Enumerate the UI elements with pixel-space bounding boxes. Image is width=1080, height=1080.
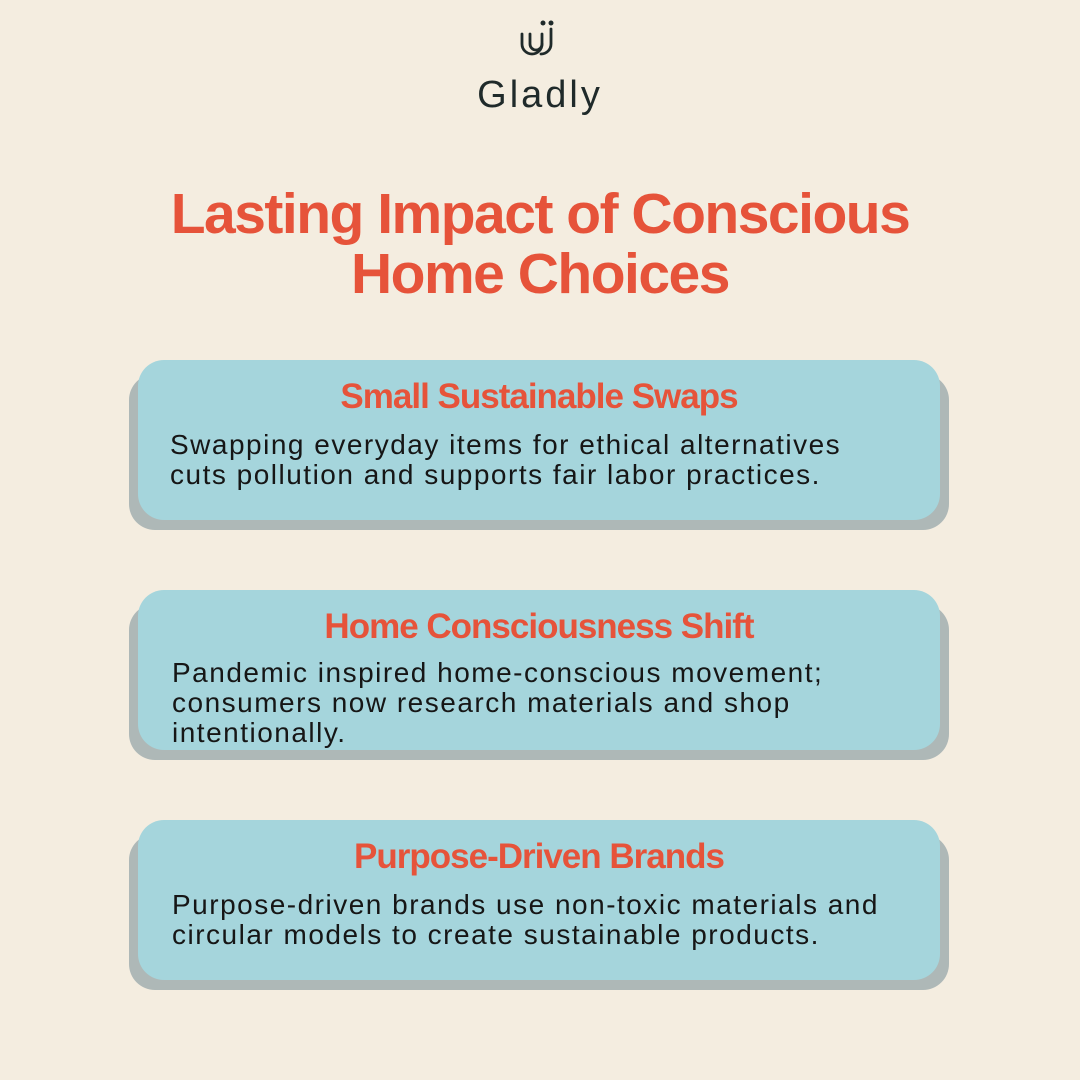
text: consumers now research materials and shop	[172, 687, 791, 718]
icon: logo mark	[520, 20, 554, 56]
panel: home consciousness shift	[129, 590, 949, 760]
text: intentionally.	[172, 717, 347, 748]
text	[170, 429, 841, 490]
title: Lasting Impact of Conscious	[171, 182, 909, 246]
logo text: Gladly	[477, 74, 603, 116]
title	[171, 182, 909, 306]
heading: Home Consciousness Shift	[324, 607, 754, 646]
logo	[477, 20, 603, 116]
text: Swapping everyday items for ethical alternatives	[170, 429, 841, 460]
text: Pandemic inspired home-conscious movement;	[172, 657, 823, 688]
panel: small sustainable swaps	[129, 360, 949, 530]
heading: Purpose-Driven Brands	[354, 837, 724, 876]
text	[172, 889, 879, 950]
text: Purpose-driven brands use non-toxic materials and	[172, 889, 879, 920]
text: cuts pollution and supports fair labor practices.	[170, 459, 821, 490]
text	[172, 657, 823, 748]
text: circular models to create sustainable products.	[172, 919, 820, 950]
title: Home Choices	[351, 242, 729, 306]
panel: purpose-driven brands	[129, 820, 949, 990]
heading: Small Sustainable Swaps	[340, 377, 738, 416]
